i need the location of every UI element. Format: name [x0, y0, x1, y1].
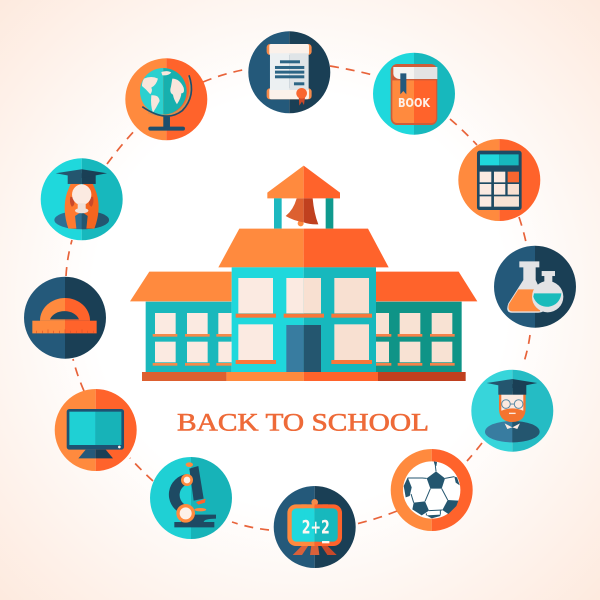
foundation	[142, 372, 466, 381]
icon: book	[373, 53, 455, 135]
cover label: BOOK	[398, 96, 431, 110]
icon: calculator	[458, 139, 540, 221]
school building	[130, 166, 477, 381]
bookmark	[400, 73, 406, 94]
bell	[286, 198, 318, 226]
icon: diploma scroll	[248, 31, 330, 113]
glasses	[502, 400, 523, 408]
calculator display	[480, 154, 519, 165]
sum on board: 2+2	[302, 517, 330, 538]
icon: soccer ball	[391, 449, 473, 531]
ball pattern	[404, 461, 460, 518]
dashed ring connecting the icons	[66, 66, 530, 530]
ribbon seal	[296, 88, 307, 106]
icon: female graduate	[41, 158, 123, 240]
calculator keys	[480, 172, 519, 207]
door	[286, 325, 321, 372]
icon: microscope	[150, 457, 232, 539]
mortarboard	[56, 169, 107, 184]
icon: chemistry flasks	[494, 246, 576, 328]
icon: chalkboard	[274, 486, 356, 568]
bell tower columns	[274, 198, 333, 229]
icon: computer monitor	[55, 389, 137, 471]
left wing	[130, 272, 232, 372]
mortarboard	[487, 379, 537, 395]
title: BACK TO SCHOOL	[177, 408, 429, 436]
icon: male graduate	[471, 370, 553, 452]
central block	[232, 267, 376, 372]
main roof	[218, 229, 389, 267]
right wing	[376, 272, 477, 372]
icon: globe	[125, 58, 207, 140]
icon: protractor and ruler	[24, 277, 106, 359]
